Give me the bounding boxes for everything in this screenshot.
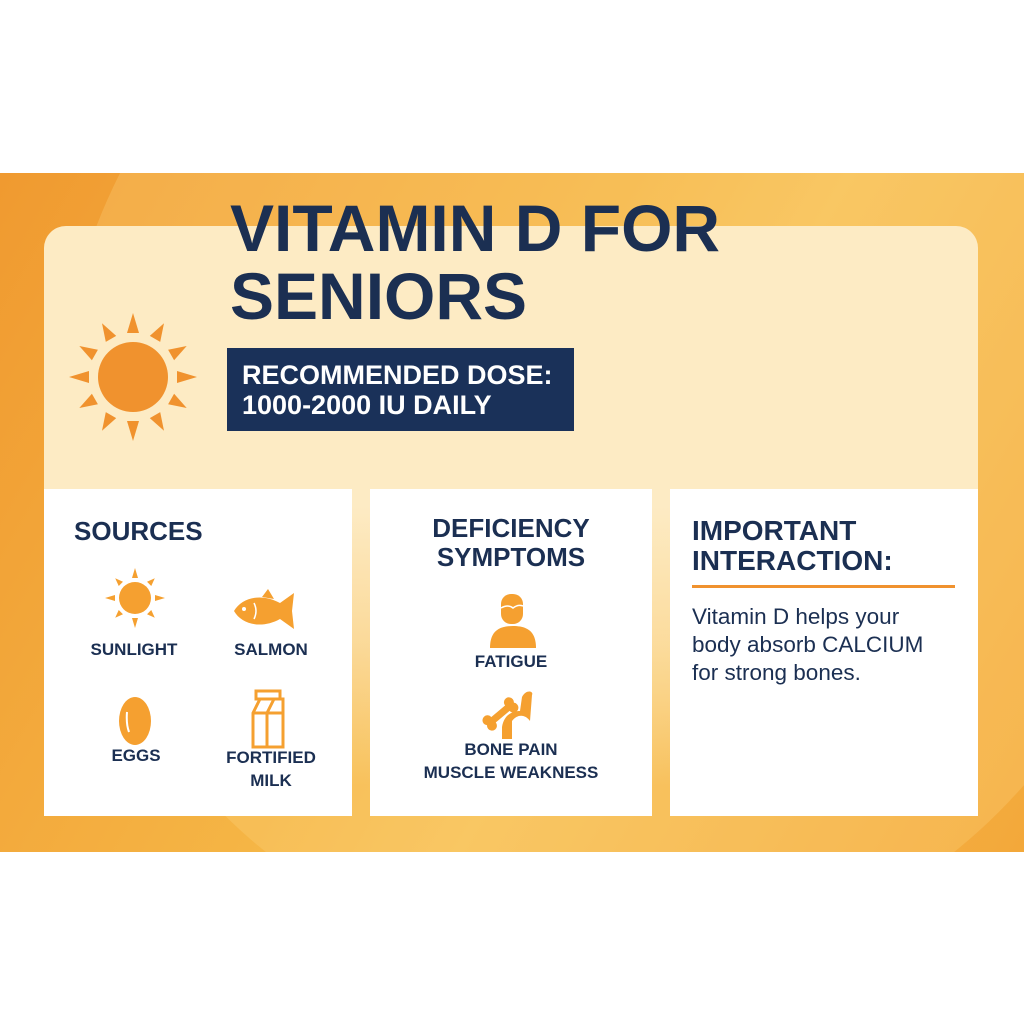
panel: deficiency symptoms (370, 489, 652, 816)
label: salmon: SALMON (234, 640, 308, 659)
label: fortified milk: FORTIFIED (226, 748, 316, 767)
title: VITAMIN D FOR (230, 191, 720, 265)
heading: important interaction: INTERACTION: (692, 545, 893, 576)
label: fortified milk: MILK (250, 771, 292, 790)
icon: sunlight (105, 568, 165, 628)
heading: sources: SOURCES (74, 516, 203, 546)
panel: sources (44, 489, 352, 816)
text block: interaction body: for strong bones. (692, 660, 861, 685)
orange band background (0, 173, 1024, 852)
heading: deficiency symptoms: SYMPTOMS (437, 542, 585, 572)
label: bone pain muscle weakness (424, 740, 598, 782)
divider line (692, 585, 955, 588)
dose box (227, 348, 574, 431)
icon: egg (119, 697, 151, 745)
text block: interaction body (692, 604, 923, 685)
icon: milk carton (252, 690, 284, 748)
heading: deficiency symptoms (432, 513, 590, 572)
text block: interaction body: Vitamin D helps your (692, 604, 899, 629)
label: sunlight: SUNLIGHT (91, 640, 177, 659)
label: eggs: EGGS (111, 746, 161, 765)
icon: sun (69, 313, 197, 441)
heading: important interaction: IMPORTANT (692, 515, 856, 546)
title: SENIORS (230, 259, 527, 333)
label: bone pain muscle weakness: BONE PAIN (464, 740, 558, 759)
label: fatigue: FATIGUE (475, 652, 547, 671)
title (230, 191, 720, 333)
dose box: 1000-2000 IU DAILY (242, 390, 492, 420)
panel: important interaction (670, 489, 978, 816)
cream panel (44, 226, 978, 786)
text block: interaction body: body absorb CALCIUM (692, 632, 923, 657)
icon: person fatigue (490, 594, 536, 648)
icon: bone and muscle (482, 692, 532, 739)
heading: important interaction (692, 515, 893, 576)
label: bone pain muscle weakness: MUSCLE WEAKNESS (424, 763, 598, 782)
heading: deficiency symptoms: DEFICIENCY (432, 513, 590, 543)
icon: salmon (234, 589, 294, 629)
dose box: RECOMMENDED DOSE: (242, 360, 553, 390)
label: fortified milk (226, 748, 316, 790)
